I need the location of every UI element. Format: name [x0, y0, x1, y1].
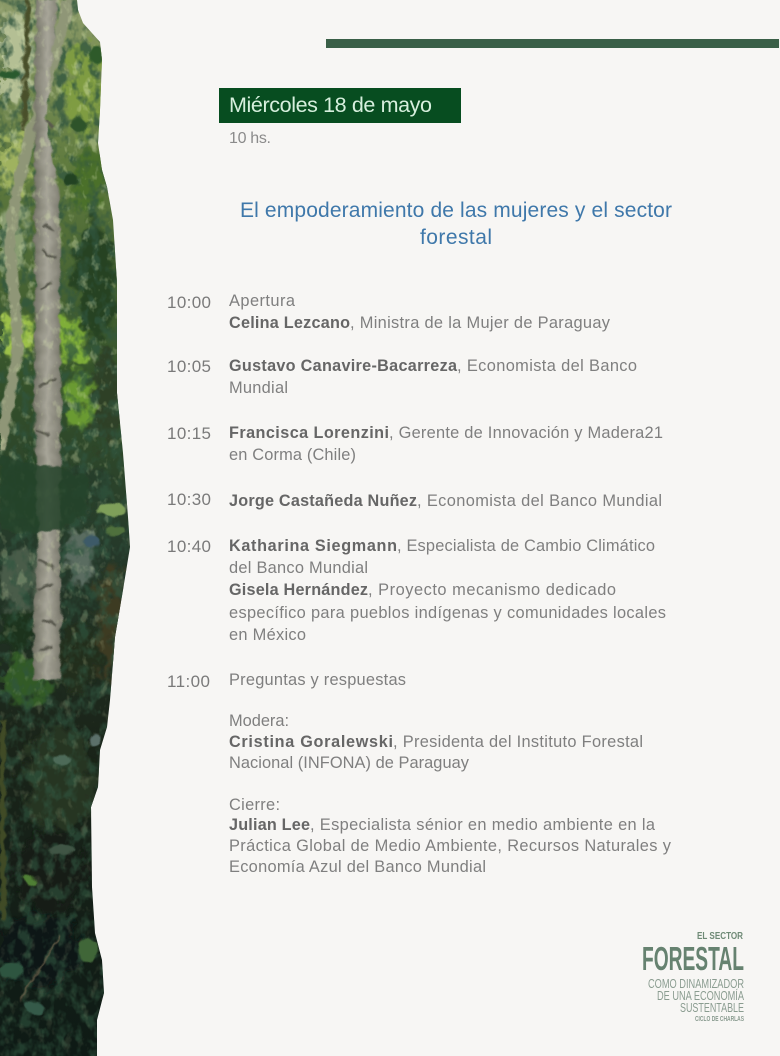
- agenda: 10:00: , Ministra de la Mujer de Paraguay: [350, 314, 611, 332]
- moderator: [229, 712, 643, 772]
- session title: forestal: [420, 226, 492, 249]
- agenda: 10:05: 10:05: [167, 357, 211, 376]
- session title: El empoderamiento de las mujeres y el sector: [240, 199, 672, 222]
- agenda: 10:05: , Economista del Banco: [457, 357, 637, 375]
- start time: 10 hs.: [229, 130, 271, 147]
- agenda: 10:40: Gisela Hernández: [229, 581, 368, 599]
- agenda: 10:15: en Corma (Chile): [229, 446, 356, 464]
- agenda: 10:00: Celina Lezcano: [229, 314, 350, 332]
- agenda: 10:30: [167, 490, 662, 510]
- main trunk: [33, 0, 62, 680]
- agenda: 10:30: 10:30: [167, 490, 211, 509]
- closing: Economía Azul del Banco Mundial: [229, 858, 486, 876]
- agenda: 10:30: , Economista del Banco Mundial: [417, 492, 662, 510]
- agenda: 11:00: 11:00: [167, 672, 210, 691]
- closing: Práctica Global de Medio Ambiente, Recursos Naturales y: [229, 837, 672, 855]
- moderator: Modera:: [229, 712, 289, 730]
- agenda: 10:30: Jorge Castañeda Nuñez: [229, 492, 417, 510]
- agenda: 10:00: 10:00: [167, 293, 211, 312]
- logo: el sector forestal: SUSTENTABLE: [680, 1000, 744, 1015]
- agenda: 10:15: Francisca Lorenzini: [229, 424, 389, 442]
- agenda: 10:05: [167, 357, 637, 397]
- agenda: 10:40: Katharina Siegmann: [229, 537, 397, 555]
- agenda: 10:05: Gustavo Canavire-Bacarreza: [229, 357, 458, 375]
- agenda: 10:40: , Proyecto mecanismo dedicado: [368, 581, 616, 599]
- agenda: 10:40: del Banco Mundial: [229, 559, 368, 577]
- closing: , Especialista sénior en medio ambiente en la: [310, 816, 656, 834]
- agenda: 10:15: [167, 424, 663, 464]
- agenda: 10:00: [167, 292, 611, 332]
- agenda: 10:40: 10:40: [167, 537, 211, 556]
- slender tree: [0, 0, 68, 450]
- agenda: 11:00: Preguntas y respuestas: [229, 671, 406, 689]
- moderator: Nacional (INFONA) de Paraguay: [229, 754, 470, 772]
- agenda: 10:40: específico para pueblos indígenas y comunidades locales: [229, 604, 666, 622]
- session title: [240, 199, 672, 249]
- agenda: 10:15: 10:15: [167, 424, 211, 443]
- logo: el sector forestal: CICLO DE CHARLAS: [695, 1016, 744, 1023]
- agenda: 10:15: , Gerente de Innovación y Madera21: [389, 424, 663, 442]
- date heading: Miércoles 18 de mayo: [229, 93, 432, 117]
- moderator: , Presidenta del Instituto Forestal: [393, 733, 643, 751]
- logo: el sector forestal: COMO DINAMIZADOR: [648, 976, 744, 991]
- forest photo strip: [0, 0, 140, 1056]
- agenda: 11:00: [167, 671, 406, 691]
- moderator: Cristina Goralewski: [229, 733, 393, 751]
- agenda: 10:05: Mundial: [229, 379, 288, 397]
- agenda: 10:40: [167, 537, 666, 644]
- agenda: 10:00: Apertura: [229, 292, 296, 310]
- logo: el sector forestal: DE UNA ECONOMÍA: [657, 988, 744, 1003]
- top green bar: [326, 39, 779, 48]
- date heading: [219, 88, 461, 123]
- agenda: 10:40: , Especialista de Cambio Climático: [397, 537, 655, 555]
- closing: [229, 796, 672, 876]
- closing: Julian Lee: [229, 816, 310, 834]
- closing: Cierre:: [229, 796, 280, 814]
- logo: el sector forestal: [642, 930, 744, 1023]
- agenda: 10:40: en México: [229, 626, 306, 644]
- logo: el sector forestal: EL SECTOR: [697, 930, 743, 942]
